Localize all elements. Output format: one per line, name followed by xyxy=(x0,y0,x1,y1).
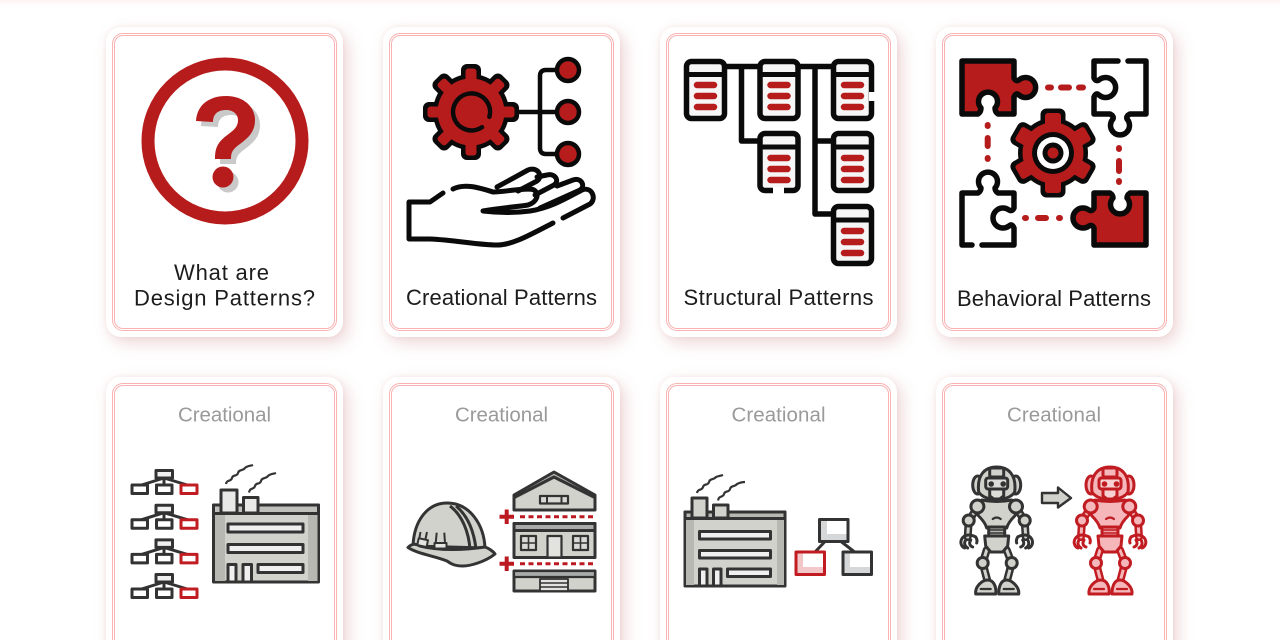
card: structural patterns xyxy=(660,27,897,337)
heading: what are design patterns: Design Patterns? xyxy=(134,286,315,310)
icon: hard hat and house layers xyxy=(408,472,595,591)
heading: creational patterns: Creational Patterns xyxy=(406,285,597,310)
card: builder xyxy=(383,377,620,640)
icon: red robot clone xyxy=(1074,467,1146,594)
icon: question mark in circle xyxy=(148,64,302,218)
category label: Creational xyxy=(1007,404,1101,426)
card: what are design patterns xyxy=(106,27,343,337)
icon: grey robot xyxy=(961,467,1033,594)
card: prototype xyxy=(936,377,1173,640)
category label: Creational xyxy=(455,404,548,426)
icon: puzzle pieces around gear xyxy=(962,61,1146,245)
category label: Creational xyxy=(732,404,826,426)
heading: structural patterns: Structural Patterns xyxy=(684,285,874,310)
icon: four trees and factory xyxy=(132,465,318,598)
heading: what are design patterns xyxy=(134,260,315,310)
category label: Creational xyxy=(178,404,271,426)
card: abstract factory xyxy=(106,377,343,640)
card: factory method xyxy=(660,377,897,640)
heading: behavioral patterns: Behavioral Patterns xyxy=(957,286,1151,311)
card: behavioral patterns xyxy=(936,27,1173,337)
icon: structure tree of boxes xyxy=(686,62,876,264)
heading: what are design patterns: What are xyxy=(174,260,269,285)
arrow: grey to red xyxy=(1042,488,1071,508)
card: creational patterns xyxy=(383,27,620,337)
icon: gear with branches over open hand xyxy=(409,59,593,245)
icon: factory and class tree xyxy=(685,475,872,586)
